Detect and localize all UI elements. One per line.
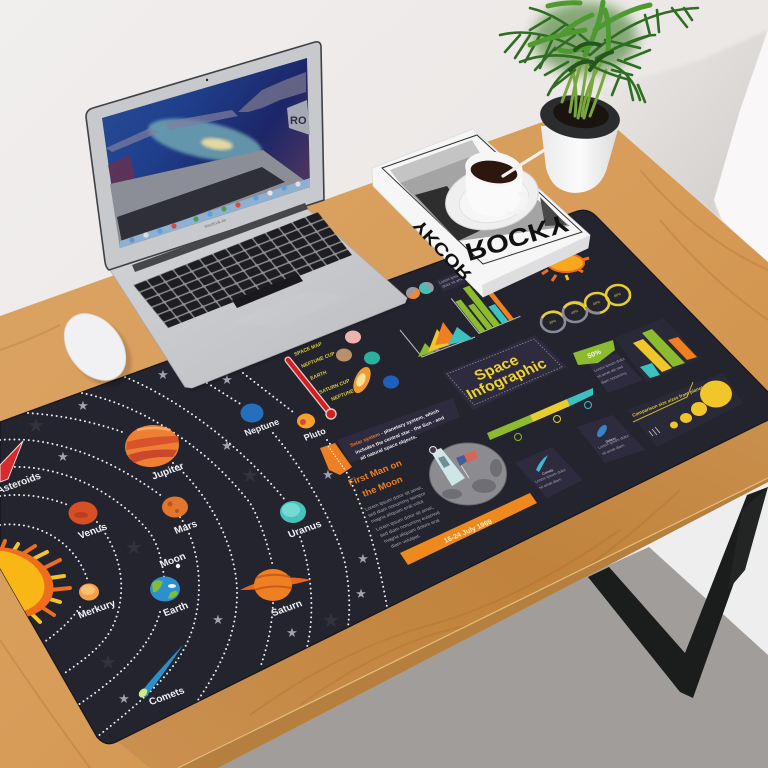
panel: 50 percent: sit amet elit sed: [596, 364, 624, 379]
foliage mass: [533, 2, 637, 74]
planet scale labels: NEPTUNE CUP: [331, 384, 367, 403]
background stars: ★: [357, 551, 369, 566]
icon: Jupiter: [125, 425, 179, 467]
reflected lettering: [106, 110, 238, 152]
moon story text: sed diam nonummy euismod: [379, 510, 442, 539]
panel: comparison of planets: [632, 380, 732, 436]
astronaut: [431, 448, 465, 486]
dock: [120, 178, 310, 248]
panel: galaxy: Lorem ipsum dolor: [597, 433, 631, 450]
book body: [372, 129, 590, 297]
scale planets: [336, 330, 399, 396]
stems: [562, 55, 606, 118]
mouse: [52, 302, 145, 399]
laptop webcam: [206, 79, 208, 81]
planet labels: Moon: [158, 551, 188, 570]
panel: 50 percent: Lorem ipsum dolor: [593, 356, 627, 373]
curtain: [714, 30, 768, 264]
planet labels: Earth: [162, 600, 190, 619]
First Man on the Moon heading: First Man on: [347, 458, 404, 488]
icon: Pluto: [297, 414, 315, 428]
small text block near book: [436, 273, 466, 292]
planet labels: Saturn: [270, 598, 304, 619]
trackpad: [232, 291, 352, 328]
planet labels: Merkury: [76, 598, 118, 621]
panel: solar system note: includes the central star - the Sun - and: [354, 415, 445, 456]
planet labels: Comets: [147, 685, 187, 708]
mat surface: [0, 210, 768, 744]
spoon: [503, 149, 546, 176]
icon: moon with astronaut: [430, 443, 506, 505]
planet labels: Jupiter: [150, 461, 186, 482]
panel: comets: sit amet diam: [538, 477, 563, 490]
icon: Saturn: [240, 569, 311, 601]
moon story text: [364, 485, 442, 550]
coffee cup: [440, 148, 546, 238]
planet labels: Pluto: [302, 426, 328, 443]
moon story text: magna aliquam erat volut: [370, 499, 426, 525]
orange tag: [320, 443, 352, 475]
date banner: [400, 493, 537, 565]
panel: title: Infographic: [464, 356, 550, 403]
First Man on the Moon heading: the Moon: [361, 474, 404, 499]
background stars: ★: [27, 415, 45, 437]
moon story text: Lorem ipsum dolor sit amet,: [364, 485, 424, 513]
planet scale labels: NEPTUNE CUP: [301, 351, 337, 370]
panel: comparison of planets: Comparison size sizes from planet: [632, 385, 704, 418]
planet labels: Neptune: [243, 417, 281, 438]
laptop base: [110, 205, 407, 388]
moon story text: diam volutpat.: [390, 533, 422, 550]
timeline: [487, 388, 593, 440]
moon story text: sed diam nonummy sempor: [367, 491, 428, 519]
panel: galaxy: Galaxy: [605, 436, 617, 444]
laptop hinge: [132, 203, 308, 272]
coffee: [469, 158, 519, 186]
background stars: ★: [77, 398, 89, 413]
reflected desk: [110, 150, 310, 248]
bar chart: [450, 286, 521, 334]
panel: comets: Comets: [541, 468, 554, 476]
background stars: ★: [221, 438, 233, 453]
thermometer: [288, 360, 336, 419]
book: [372, 129, 590, 297]
panel: large bars: [633, 329, 697, 378]
icon: Earth: [150, 576, 180, 602]
reflected red tint: [108, 155, 135, 186]
laptop keyboard: [133, 212, 352, 328]
laptop screen: [102, 58, 310, 248]
cover text band: [390, 140, 480, 183]
reflected book: [287, 100, 310, 135]
background stars: ★: [118, 691, 130, 706]
panel: galaxy: [577, 415, 645, 463]
book pages edge: [482, 235, 590, 297]
background stars: ★: [99, 652, 117, 674]
panel: 50 percent: [573, 340, 643, 393]
panel: solar system note: all natural space objects.: [359, 434, 419, 462]
moon story text: magna aliquam dolore erat: [383, 518, 442, 545]
title text: Space: [471, 352, 522, 384]
planet labels: Venus: [77, 522, 110, 542]
background stars: ★: [241, 465, 259, 487]
icon: Neptune: [240, 404, 264, 422]
area chart: [400, 322, 475, 357]
icon: comet: [137, 645, 183, 699]
gauge values: 30%: [549, 319, 557, 325]
ring gauges: [541, 285, 630, 332]
lower white wall: [560, 470, 768, 655]
wood grain: [0, 170, 768, 768]
gauge values: 80%: [614, 292, 622, 298]
cup: [466, 166, 522, 217]
saucer: [440, 158, 544, 238]
orbits: [0, 373, 387, 737]
wall shadow right of the desk: [600, 30, 768, 222]
moon story text: Lorem ipsum dolor sit amet,: [375, 505, 435, 533]
icon: asteroid: [0, 441, 23, 482]
icon: top sun: [542, 254, 589, 281]
plant: [500, 2, 698, 118]
reflected plant: [238, 72, 306, 112]
background stars: ★: [322, 610, 340, 632]
spine title: YKCOR: [410, 215, 475, 284]
small planets top: [406, 282, 434, 299]
cover title: ROCKY: [462, 208, 572, 266]
background stars: ★: [212, 612, 224, 627]
desk front band: [118, 421, 768, 768]
icon: sun: [0, 539, 70, 627]
panel: 50 percent: diam nonummy: [600, 371, 628, 385]
plant pot: [538, 91, 622, 193]
planet scale labels: [294, 342, 354, 401]
icon: Mercury: [79, 584, 99, 600]
gauge values: 60%: [593, 300, 601, 306]
desk front edge: [178, 478, 768, 768]
panel: title: [443, 335, 567, 410]
cover border: [382, 135, 582, 264]
background stars: [27, 367, 369, 706]
small text block near book: Lorem ipsum: [438, 272, 462, 285]
panel: comets: [515, 447, 583, 498]
laptop screen: RO: [290, 115, 307, 127]
planet scale labels: SATURN CUP: [319, 378, 351, 396]
gauge values: 40%: [571, 309, 579, 315]
fronds: [500, 8, 698, 102]
cover photograph: [400, 153, 570, 241]
icon: Mars: [162, 496, 188, 518]
panel: galaxy: sit amet diam: [601, 443, 626, 456]
galaxy wallpaper: [145, 110, 265, 170]
background stars: ★: [157, 367, 169, 382]
gauge values: [549, 292, 622, 325]
icon: Moon dot: [176, 564, 180, 568]
planet scale labels: EARTH: [310, 370, 328, 382]
table leg: [588, 487, 768, 698]
floor: [218, 547, 768, 768]
laptop model text: MacBook Air: [204, 217, 227, 229]
background stars: ★: [221, 372, 233, 387]
small text block near book: dolor sit amet: [441, 275, 466, 289]
panel: 50 percent: 50%: [587, 348, 603, 360]
solar system text: Solar system - planetary system, which: [349, 408, 440, 449]
planet labels: [0, 417, 328, 708]
laptop lid: [86, 42, 324, 270]
planet scale labels: SPACE MAP: [294, 341, 324, 358]
laptop shadow: [190, 295, 410, 392]
background stars: ★: [322, 467, 334, 482]
First Man on the Moon heading: [348, 461, 403, 496]
date banner: 16-24 July 1969: [443, 519, 494, 545]
background stars: ★: [286, 625, 298, 640]
background stars: ★: [57, 449, 69, 464]
planet labels: Mars: [173, 519, 200, 537]
flag: [457, 459, 469, 478]
desk mat: [0, 210, 768, 744]
background stars: ★: [355, 586, 367, 601]
background stars: ★: [125, 537, 143, 559]
panel: comets: Lorem ipsum dolor: [534, 467, 568, 484]
icon: Uranus: [280, 501, 306, 523]
laptop: [86, 42, 410, 392]
planet labels: Uranus: [286, 519, 324, 541]
icon: Venus: [68, 502, 98, 524]
laptop spacebar: [232, 274, 303, 308]
panel: solar system note: [320, 398, 460, 475]
